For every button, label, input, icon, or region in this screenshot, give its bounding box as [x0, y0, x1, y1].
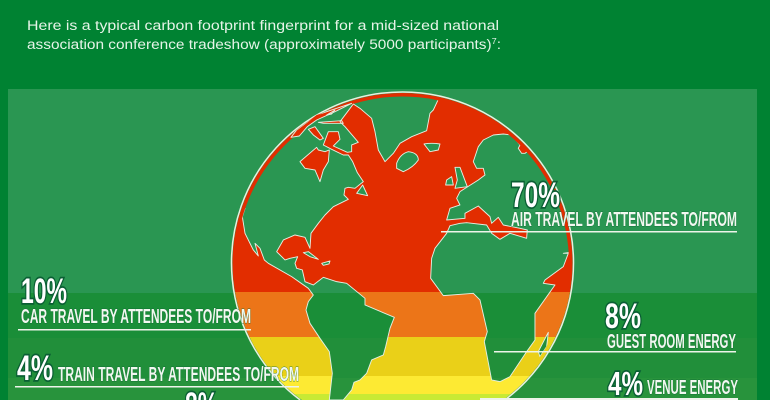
callout: train travel 4% — [15, 349, 299, 388]
intro text: Here is a typical carbon footprint fingerprint for a mid-sized national — [27, 18, 499, 33]
intro text: association conference tradeshow (approximately 5000 participants) — [27, 37, 434, 52]
callout: air travel 70%: 70% — [511, 176, 560, 215]
globe with footprint bands — [230, 91, 574, 400]
callout: car travel 10% — [18, 272, 251, 330]
callout: car travel 10%: 10% — [21, 272, 67, 311]
callout: train travel 4%: TRAIN TRAVEL BY ATTENDEES TO/FROM — [58, 364, 299, 386]
callout: guest room energy 8% — [494, 297, 736, 353]
callout: guest room energy 8%: 8% — [605, 297, 641, 336]
panel: striped background — [8, 89, 757, 400]
callout: car travel 10%: CAR TRAVEL BY ATTENDEES TO/FROM — [21, 306, 251, 328]
callout: air travel 70% — [441, 176, 737, 232]
intro text: 7 — [492, 37, 497, 46]
intro text — [27, 18, 501, 52]
callout: train travel 4%: 4% — [17, 349, 53, 388]
intro text: : — [497, 37, 501, 52]
callout: venue energy 4% — [480, 365, 738, 400]
